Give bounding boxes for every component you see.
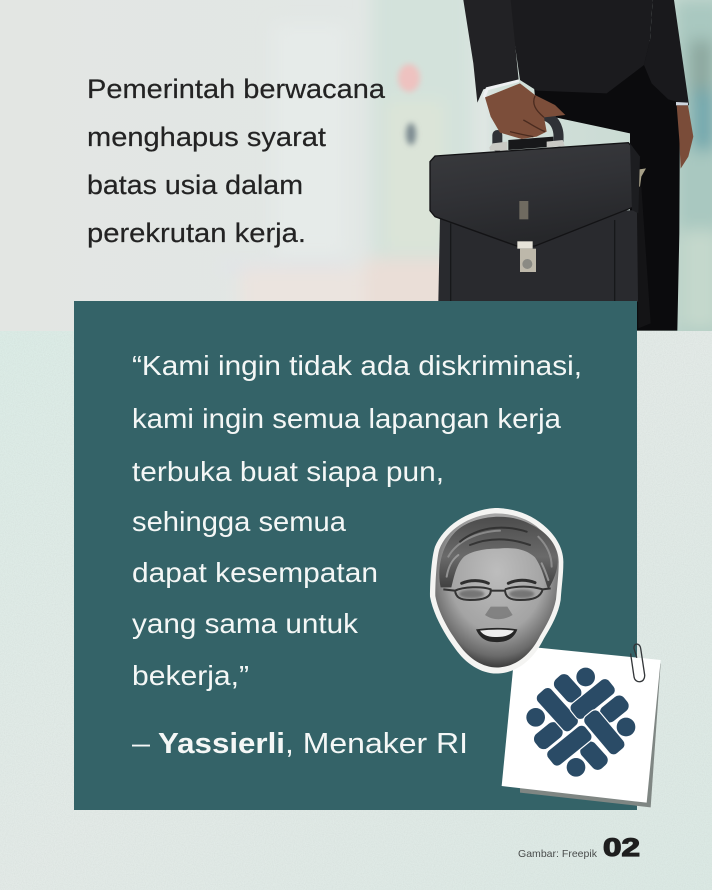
intro text: Pemerintah berwacana	[87, 74, 386, 104]
photo background: blurred office	[240, 0, 712, 331]
face	[435, 513, 559, 667]
note shadow	[520, 663, 661, 807]
flap	[430, 143, 633, 246]
attribution: –	[132, 728, 151, 760]
intro text: batas usia dalam	[87, 170, 303, 200]
attribution: , Menaker RI	[285, 728, 468, 760]
quote text: bekerja,”	[132, 660, 249, 691]
page number: 02	[603, 834, 640, 862]
attribution: Yassierli	[158, 728, 285, 760]
quote text: dapat kesempatan	[132, 557, 378, 588]
quote text: “Kami ingin tidak ada diskriminasi,	[132, 350, 582, 381]
shirt cuffs	[483, 79, 519, 99]
intro text: menghapus syarat	[87, 122, 327, 152]
hair highlights	[447, 528, 552, 580]
trousers	[533, 40, 689, 331]
quote text	[132, 350, 582, 691]
right sleeve	[644, 0, 689, 105]
attribution	[132, 728, 468, 760]
left sleeve	[463, 0, 519, 103]
eye shadows	[459, 590, 534, 598]
quote text: kami ingin semua lapangan kerja	[132, 403, 562, 434]
intro text: perekrutan kerja.	[87, 218, 306, 248]
quote text: terbuka buat siapa pun,	[132, 456, 444, 487]
paperclip	[631, 644, 645, 682]
briefcase handle	[497, 115, 559, 147]
nose and mouth	[485, 607, 513, 619]
quote text: yang sama untuk	[132, 608, 358, 639]
case body	[438, 210, 639, 302]
lower textured background	[0, 331, 712, 890]
portrait: Yassierli	[430, 508, 563, 674]
right hand	[677, 105, 693, 169]
logo	[526, 668, 635, 777]
jacket body	[508, 0, 653, 93]
eyebrows	[462, 580, 535, 583]
note	[502, 645, 661, 803]
man with briefcase photo	[430, 0, 693, 331]
panel: quote	[74, 301, 637, 810]
sticker outline	[430, 508, 563, 674]
left hand	[485, 83, 565, 139]
hair	[439, 517, 558, 589]
glasses	[443, 587, 551, 600]
sticky note with ministry logo	[502, 644, 661, 807]
image credit: Gambar: Freepik	[518, 848, 598, 860]
strap	[637, 187, 651, 328]
quote text: sehingga semua	[132, 506, 347, 537]
clasp	[517, 241, 533, 249]
metal tag	[519, 201, 528, 219]
intro text	[87, 74, 386, 248]
